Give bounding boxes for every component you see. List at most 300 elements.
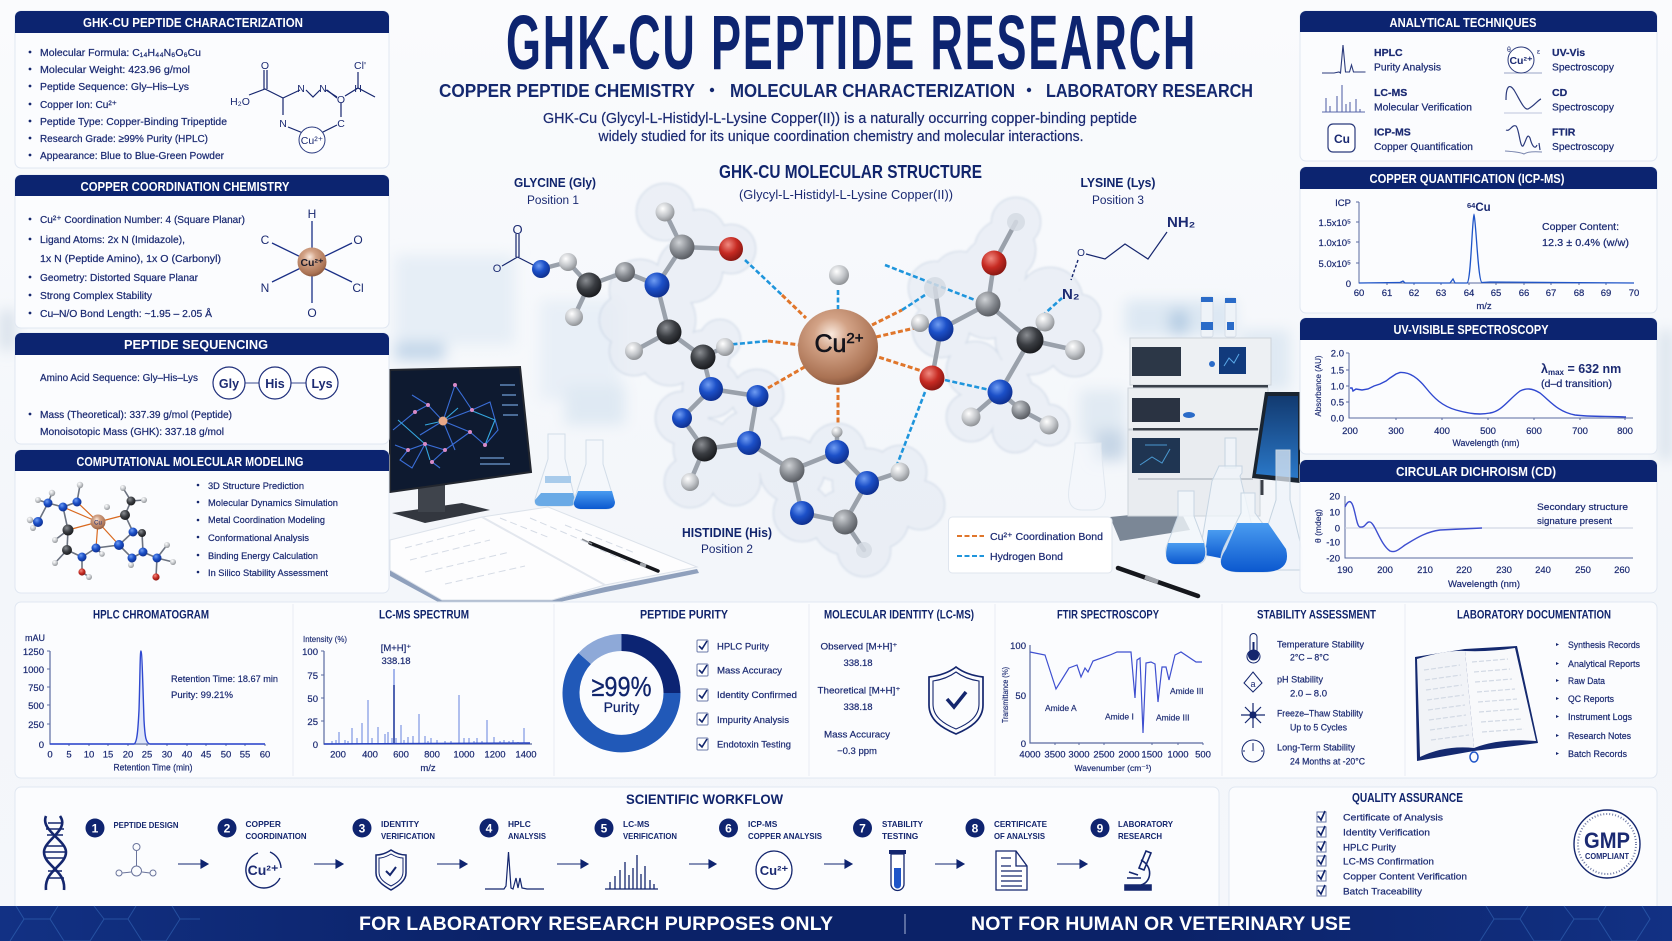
panel: laboratory documentation overlay: Raw Data	[1568, 676, 1606, 687]
chart: ICP-MS spectrum: 67	[1546, 288, 1556, 299]
panel: peptide characterization: Molecular Weight: 423.96 g/mol	[40, 64, 190, 76]
icon: UV-Vis: ε	[1537, 49, 1540, 56]
chart: HPLC chromatogram: 45	[201, 750, 211, 760]
chart: LC-MS spectrum: 338.18	[381, 656, 411, 667]
chart: LC-MS spectrum: 400	[362, 750, 378, 760]
panel: copper coordination chemistry: 1x N (Peptide Amino), 1x O (Carbonyl)	[40, 253, 221, 265]
lysine label: Position 3	[1092, 195, 1144, 207]
panel: analytical techniques	[1300, 11, 1657, 161]
checklist: purity: Endotoxin Testing	[717, 740, 791, 750]
chart: CD spectrum: -10	[1326, 538, 1340, 548]
chart: CD spectrum: signature present	[1537, 516, 1612, 527]
chart: HPLC chromatogram	[23, 610, 278, 774]
workflow step numbers: 9	[1097, 822, 1104, 836]
chart: UV-Vis absorbance	[1313, 348, 1633, 449]
chart: CD spectrum: 250	[1575, 565, 1591, 576]
diagram: square planar coordination	[261, 207, 364, 320]
diagram: amino acid chain: Gly	[219, 377, 239, 391]
icon: document	[996, 851, 1027, 890]
lysine label: LYSINE (Lys)	[1080, 175, 1156, 190]
panel: laboratory documentation overlay: Synthesis Records	[1568, 640, 1640, 651]
block: molecular identity: 338.18	[843, 658, 873, 669]
panel: copper coordination chemistry	[15, 175, 389, 328]
chart: ICP-MS spectrum: 64	[1464, 288, 1474, 299]
chart: ICP-MS spectrum: Copper Content:	[1542, 221, 1619, 233]
panel: ICP-MS copper quantification: COPPER QUANTIFICATION (ICP-MS)	[1370, 171, 1564, 186]
workflow step labels: CERTIFICATE	[994, 819, 1047, 829]
chart: UV-Vis absorbance: 200	[1342, 426, 1358, 437]
panel: analytical techniques: Spectroscopy	[1552, 62, 1615, 74]
subtitle: MOLECULAR CHARACTERIZATION	[730, 80, 1015, 101]
workflow step labels: RESEARCH	[1118, 831, 1162, 841]
workflow step labels: COORDINATION	[246, 831, 306, 841]
chart: LC-MS spectrum: 75	[307, 671, 318, 682]
panel: analytical techniques: HPLC	[1374, 47, 1403, 59]
chart: HPLC chromatogram: Purity: 99.21%	[171, 690, 234, 701]
chart: FTIR spectrum: 1000	[1167, 750, 1189, 760]
QA checklist: Copper Content Verification	[1343, 872, 1467, 882]
diagram: square planar coordination: Cu²⁺	[300, 257, 324, 269]
panel: analytical techniques: CD	[1552, 87, 1568, 99]
chart: LC-MS spectrum: Intensity (%)	[303, 634, 347, 644]
illustration: open lab book	[1415, 646, 1538, 762]
panel: laboratory documentation overlay: Research Notes	[1568, 731, 1631, 742]
chart: LC-MS spectrum: 25	[307, 717, 318, 728]
chart: LC-MS spectrum: 1400	[515, 750, 537, 760]
chart: ICP-MS spectrum: 70	[1629, 288, 1639, 299]
panel: analytical techniques: Purity Analysis	[1374, 62, 1441, 74]
chart: FTIR spectrum: 3500	[1044, 750, 1066, 760]
block: molecular identity: Theoretical [M+H]⁺	[818, 686, 900, 696]
block: molecular identity: MOLECULAR IDENTITY (LC-MS)	[824, 610, 974, 622]
panel: quality assurance	[1229, 787, 1657, 912]
checklist: purity: HPLC Purity	[717, 642, 769, 652]
chart: HPLC chromatogram: 500	[28, 701, 44, 712]
intro text: widely studied for its unique coordination chemistry and molecular interactions.	[598, 129, 1084, 145]
badge: GMP compliant: GMP	[1584, 828, 1630, 853]
chart: UV-Vis absorbance: 600	[1526, 426, 1542, 437]
panel: laboratory documentation overlay: Instrument Logs	[1568, 712, 1632, 723]
panel: laboratory documentation overlay	[1415, 610, 1640, 762]
lab instrument stack	[1110, 297, 1300, 541]
QA checklist: LC-MS Confirmation	[1343, 856, 1434, 868]
legend: bond types: Hydrogen Bond	[990, 551, 1063, 563]
copper ion sphere: Cu	[814, 330, 846, 358]
chart: HPLC chromatogram: HPLC CHROMATOGRAM	[93, 610, 209, 622]
lysine label	[1080, 175, 1156, 207]
chart: FTIR spectrum: Transmittance (%)	[1000, 667, 1010, 723]
checklist: purity	[697, 640, 797, 750]
chart: UV-Vis absorbance: 0.5	[1331, 398, 1344, 408]
panel: laboratory documentation overlay: Analytical Reports	[1568, 659, 1640, 670]
block: stability assessment	[1241, 610, 1376, 768]
lysine side chain skeletal: NH₂	[1167, 214, 1195, 231]
legend: bond types: Cu²⁺ Coordination Bond	[990, 531, 1103, 543]
icon: microscope	[1125, 851, 1151, 890]
chart: UV-Vis absorbance: 500	[1480, 426, 1496, 437]
panel: circular dichroism	[1300, 460, 1657, 593]
glycine skeletal fragment labels	[493, 222, 523, 275]
icon: Cu ion circle: Cu²⁺	[760, 863, 788, 878]
chart: HPLC chromatogram: 5	[66, 750, 72, 760]
chart: HPLC chromatogram: mAU	[25, 633, 45, 643]
panel: analytical techniques: LC-MS	[1374, 87, 1407, 99]
diagram: GHK-Cu skeletal formula	[230, 60, 375, 153]
subtitle: COPPER PEPTIDE CHEMISTRY	[439, 80, 696, 101]
chart: HPLC chromatogram: 0	[47, 750, 53, 760]
legend: bond types	[948, 517, 1112, 573]
panel: analytical techniques: Molecular Verification	[1374, 102, 1472, 114]
panel: analytical techniques: FTIR	[1552, 126, 1576, 138]
icon: UV-Vis: θ	[1507, 47, 1511, 54]
chart: LC-MS spectrum: 0	[313, 740, 318, 751]
icon: clock	[1242, 740, 1264, 762]
panel: computational modeling	[15, 450, 389, 593]
chart: ICP-MS spectrum: 65	[1491, 288, 1501, 299]
diagram: square planar coordination: O	[353, 233, 363, 247]
chart: FTIR spectrum: FTIR SPECTROSCOPY	[1057, 610, 1159, 622]
chart: FTIR spectrum: Amide I	[1105, 712, 1134, 722]
panel: copper coordination chemistry: Cu–N/O Bond Length: ~1.95 – 2.05 Å	[40, 307, 212, 320]
chart: ICP-MS spectrum: 1.5x10⁵	[1319, 218, 1351, 229]
blurred laboratory background	[0, 255, 1672, 460]
block: stability assessment: 2°C – 8°C	[1290, 652, 1329, 664]
chart: HPLC chromatogram: 15	[103, 750, 113, 760]
diagram: small ball-and-stick model: Cu	[94, 520, 102, 526]
panel: peptide sequencing: Amino Acid Sequence: Gly–His–Lys	[40, 372, 198, 384]
panel: copper coordination chemistry: Geometry: Distorted Square Planar	[40, 272, 198, 284]
diagram: GHK-Cu skeletal formula: N	[279, 118, 287, 130]
chart: CD spectrum: 240	[1535, 565, 1551, 576]
footer banner	[0, 906, 1672, 941]
lysine side chain skeletal: N₂	[1062, 286, 1080, 303]
workflow step numbers: 2	[224, 822, 231, 836]
block: stability assessment: Temperature Stability	[1277, 640, 1364, 650]
panel: peptide characterization	[15, 11, 389, 168]
diagram: square planar coordination: O	[307, 306, 317, 320]
panel: analytical techniques: Spectroscopy	[1552, 102, 1615, 114]
chart: UV-Vis absorbance: (d–d transition)	[1541, 378, 1612, 390]
chart: UV-Vis absorbance: 300	[1388, 426, 1404, 437]
icon: HPLC trace	[485, 852, 544, 889]
icon: test tube	[889, 850, 906, 890]
intro text	[543, 111, 1137, 145]
chart: UV-Vis absorbance: Wavelength (nm)	[1452, 438, 1520, 449]
diagram: GHK-Cu skeletal formula: N	[319, 83, 327, 95]
open notebook with pen	[390, 507, 699, 603]
chart: FTIR spectrum: 2500	[1093, 750, 1115, 760]
chart: HPLC chromatogram: 60	[260, 750, 270, 760]
chart: LC-MS spectrum: 100	[302, 647, 318, 658]
icon: pH drop: a	[1250, 679, 1256, 689]
histidine label: Position 2	[701, 544, 753, 556]
block: molecular identity: 338.18	[843, 702, 873, 713]
diagram: amino acid chain	[213, 367, 338, 399]
lysine side chain skeletal: O	[1077, 248, 1085, 259]
footer banner: FOR LABORATORY RESEARCH PURPOSES ONLY	[359, 913, 833, 935]
chart: UV-Vis absorbance: 2.0	[1331, 348, 1344, 360]
chart: LC-MS spectrum: 600	[393, 750, 409, 760]
chart: UV-Vis absorbance: 700	[1572, 426, 1588, 437]
panel: computational modeling: In Silico Stability Assessment	[208, 568, 328, 579]
workflow step labels: STABILITY	[882, 819, 923, 829]
chart: UV-Vis absorbance: 400	[1434, 426, 1450, 437]
chart: UV-Vis absorbance: λ	[1541, 362, 1548, 376]
panel: analytical techniques: ANALYTICAL TECHNIQUES	[1390, 15, 1537, 30]
chart: HPLC chromatogram: 50	[221, 750, 231, 760]
icon: LC-MS bars	[605, 855, 658, 889]
histidine label	[682, 525, 772, 556]
glycine skeletal fragment labels: O	[512, 222, 523, 237]
chart: CD spectrum: 10	[1329, 508, 1340, 518]
chart: FTIR spectrum: 0	[1021, 739, 1026, 750]
icon: FTIR	[1505, 126, 1542, 154]
chart: peptide purity donut: Purity	[604, 699, 639, 715]
diagram: GHK-Cu skeletal formula: Cl'	[354, 60, 366, 72]
chart: HPLC chromatogram: 1250	[23, 647, 44, 658]
chart: ICP-MS spectrum: Cu	[1475, 202, 1491, 214]
diagram: GHK-Cu skeletal formula: O	[337, 94, 345, 106]
heading: molecular structure: GHK-CU MOLECULAR STRUCTURE	[719, 162, 982, 182]
panel: computational modeling: Molecular Dynamics Simulation	[208, 498, 338, 509]
icon: copper ion cycle	[246, 852, 281, 888]
workflow step numbers: 3	[359, 822, 366, 836]
workflow step labels: COPPER ANALYSIS	[748, 831, 822, 841]
chart: CD spectrum: Wavelength (nm)	[1448, 579, 1520, 590]
chart: FTIR spectrum	[1000, 610, 1211, 773]
chart: ICP-MS spectrum: 68	[1574, 288, 1584, 299]
intro text: GHK-Cu (Glycyl-L-Histidyl-L-Lysine Copper(II)) is a naturally occurring copper-binding peptide	[543, 111, 1137, 127]
chart: ICP-MS spectrum	[1319, 198, 1639, 312]
diagram: GHK-Cu skeletal formula: H	[354, 83, 362, 95]
diagram: GHK-Cu skeletal formula: H₂O	[230, 96, 250, 108]
workflow step numbers: 5	[601, 822, 608, 836]
panel: peptide characterization: Molecular Formula: C₁₄H₄₄N₆O₆Cu	[40, 47, 201, 59]
block: molecular identity: Observed [M+H]⁺	[820, 642, 898, 652]
panel: laboratory documentation overlay: Batch Records	[1568, 749, 1627, 760]
chart: UV-Vis absorbance: 1.0	[1331, 382, 1344, 392]
workflow step numbers	[86, 818, 1110, 838]
checklist: purity: Mass Accuracy	[717, 666, 782, 676]
icon: CD	[1504, 87, 1542, 113]
glycine label: Position 1	[527, 195, 579, 207]
chart: HPLC chromatogram: 750	[28, 683, 44, 694]
coordination and hydrogen bonds	[725, 260, 1078, 470]
icon: pH drop	[1244, 672, 1262, 692]
chart: FTIR spectrum: 500	[1195, 750, 1211, 760]
glycine label: GLYCINE (Gly)	[514, 175, 596, 190]
panel: copper coordination chemistry: Strong Complex Stability	[40, 290, 153, 302]
copper ion sphere	[798, 309, 878, 385]
chart: CD spectrum: 20	[1329, 492, 1340, 502]
molecule: central GHK-Cu 3D structure	[493, 184, 1101, 576]
chart: HPLC chromatogram: 0	[39, 740, 44, 751]
diagram: square planar coordination: N	[261, 281, 269, 295]
panel: peptide sequencing: Monoisotopic Mass (GHK): 337.18 g/mol	[40, 426, 224, 438]
chart: HPLC chromatogram: 10	[84, 750, 94, 760]
chart: LC-MS spectrum: m/z	[420, 763, 436, 774]
workflow step numbers: 4	[486, 822, 493, 836]
block: molecular identity: −0.3 ppm	[837, 746, 877, 757]
panel: peptide characterization: Peptide Type: Copper-Binding Tripeptide	[40, 116, 227, 128]
panel: laboratory documentation overlay: QC Reports	[1568, 694, 1614, 705]
icon: identity shield	[376, 850, 406, 890]
chart: peptide purity donut: PEPTIDE PURITY	[640, 610, 728, 622]
icon: peptide design	[116, 844, 156, 876]
chart: ICP-MS spectrum: ICP	[1335, 198, 1351, 209]
chart: ICP-MS spectrum: 66	[1519, 288, 1529, 299]
chart: LC-MS spectrum: 200	[330, 750, 346, 760]
chart: CD spectrum	[1313, 492, 1633, 590]
panel: peptide characterization: Copper Ion: Cu²⁺	[40, 99, 117, 111]
chart: CD spectrum: 190	[1337, 565, 1353, 576]
chart: ICP-MS spectrum: 12.3 ± 0.4% (w/w)	[1542, 237, 1629, 249]
chart: ICP-MS spectrum: 5.0x10⁵	[1319, 259, 1351, 270]
panel: laboratory documentation overlay: LABORATORY DOCUMENTATION	[1457, 610, 1611, 622]
icon: Cu box	[1328, 124, 1355, 152]
panel: peptide characterization: Research Grade: ≥99% Purity (HPLC)	[40, 133, 208, 145]
panel: computational modeling: COMPUTATIONAL MOLECULAR MODELING	[76, 454, 304, 469]
chart: ICP-MS spectrum: 64	[1467, 201, 1476, 210]
panel: computational modeling: Binding Energy Calculation	[208, 551, 318, 562]
block: stability assessment: 24 Months at -20°C	[1290, 756, 1365, 768]
QA checklist: Identity Verification	[1343, 828, 1430, 838]
chart: ICP-MS spectrum: 0	[1346, 279, 1351, 290]
chart: peptide purity donut: ≥99%	[592, 671, 652, 702]
chart: ICP-MS spectrum: 1.0x10⁵	[1319, 238, 1351, 249]
panel: analytical techniques: Copper Quantification	[1374, 141, 1473, 153]
panel: scientific workflow	[15, 787, 1219, 912]
checklist: purity: Impurity Analysis	[717, 715, 789, 726]
panel: copper coordination chemistry: Cu²⁺ Coordination Number: 4 (Square Planar)	[40, 214, 245, 226]
chart: CD spectrum: 210	[1417, 565, 1433, 576]
block: molecular identity	[818, 610, 983, 757]
diagram: square planar coordination: Cl	[352, 281, 364, 295]
workflow step labels: ICP-MS	[748, 819, 778, 829]
panel: peptide sequencing	[15, 333, 389, 444]
badge: GMP compliant: COMPLIANT	[1585, 852, 1629, 861]
block: molecular identity: Mass Accuracy	[824, 730, 890, 740]
chart: CD spectrum: Secondary structure	[1537, 502, 1628, 513]
diagram: amino acid chain: His	[265, 377, 285, 391]
chart: CD spectrum: 260	[1614, 565, 1630, 576]
chart: CD spectrum: θ (mdeg)	[1313, 509, 1323, 543]
chart: HPLC chromatogram: 30	[162, 750, 172, 760]
chart: CD spectrum: 220	[1456, 565, 1472, 576]
chart: FTIR spectrum: Wavenumber (cm⁻¹)	[1075, 763, 1152, 773]
diagram: GHK-Cu skeletal formula: C	[337, 118, 345, 130]
panel: analytical techniques: Spectroscopy	[1552, 141, 1615, 153]
workflow step labels: COPPER	[246, 819, 281, 829]
panel: UV-visible spectroscopy	[1300, 318, 1657, 454]
chart: LC-MS spectrum: [M+H]⁺	[381, 643, 411, 654]
icon: thermometer	[1247, 634, 1260, 663]
workflow step numbers: 6	[725, 822, 732, 836]
workflow step labels: PEPTIDE DESIGN	[114, 820, 178, 830]
lysine side chain skeletal	[1062, 214, 1195, 303]
chart: UV-Vis absorbance: = 632 nm	[1564, 362, 1621, 376]
chart: UV-Vis absorbance: 0.0	[1331, 414, 1344, 424]
chart: FTIR spectrum: 50	[1015, 691, 1026, 702]
chart: HPLC chromatogram: 55	[240, 750, 250, 760]
diagram: GHK-Cu skeletal formula: O	[261, 60, 269, 72]
workflow step labels: VERIFICATION	[381, 831, 435, 841]
panel: quality assurance: QUALITY ASSURANCE	[1352, 791, 1463, 805]
icon: UV-Vis: Cu²⁺	[1509, 55, 1533, 67]
badge: GMP compliant	[1574, 810, 1640, 878]
icon: Cu ion circle	[756, 851, 792, 889]
checklist: purity: Identity Confirmed	[717, 690, 797, 701]
chart: ICP-MS spectrum: 63	[1436, 288, 1446, 299]
glycine label	[514, 175, 596, 207]
chart: UV-Vis absorbance: 1.5	[1331, 366, 1344, 376]
chart: ICP-MS spectrum: 62	[1409, 288, 1419, 299]
panel: peptide characterization: GHK-CU PEPTIDE CHARACTERIZATION	[83, 15, 303, 30]
chart: ICP-MS spectrum: 69	[1601, 288, 1611, 299]
panel: peptide sequencing: PEPTIDE SEQUENCING	[124, 337, 268, 352]
chart: HPLC chromatogram: Retention Time (min)	[114, 762, 192, 774]
panel: analytical techniques: UV-Vis	[1552, 47, 1585, 59]
panel: analytical techniques: ICP-MS	[1374, 126, 1411, 138]
diagram: small ball-and-stick model	[27, 482, 176, 581]
workflow step labels: LABORATORY	[1118, 819, 1173, 829]
chart: CD spectrum: -20	[1326, 554, 1340, 564]
chart: HPLC chromatogram: 250	[28, 720, 44, 731]
chart: ICP-MS spectrum: m/z	[1476, 301, 1492, 312]
subtitle: LABORATORY RESEARCH	[1046, 80, 1253, 101]
copper ion sphere: 2+	[846, 330, 864, 347]
panel: computational modeling: Metal Coordination Modeling	[208, 515, 325, 526]
chart: FTIR spectrum: 2000	[1118, 750, 1140, 760]
workflow step labels: IDENTITY	[381, 819, 420, 829]
workflow step labels: TESTING	[882, 831, 918, 841]
workflow step labels: ANALYSIS	[508, 831, 546, 841]
heading: molecular structure: (Glycyl-L-Histidyl-L-Lysine Copper(II))	[739, 188, 953, 202]
chart: HPLC chromatogram: 40	[182, 750, 192, 760]
panel: copper coordination chemistry: Ligand Atoms: 2x N (Imidazole),	[40, 234, 185, 246]
chart: HPLC chromatogram: Retention Time: 18.67 min	[171, 674, 278, 685]
workflow step numbers: 1	[92, 822, 99, 836]
electron density surface	[600, 184, 1101, 576]
chart: LC-MS spectrum: 800	[424, 750, 440, 760]
glass flasks with blue solution	[1069, 438, 1302, 596]
panel: scientific workflow: SCIENTIFIC WORKFLOW	[626, 791, 784, 807]
workflow step numbers: 8	[972, 822, 979, 836]
diagram: square planar coordination: C	[261, 233, 270, 247]
atoms	[532, 202, 1085, 558]
skeletal bonds	[502, 212, 1075, 550]
QA checklist	[1317, 811, 1467, 898]
chart: FTIR spectrum: Amide A	[1045, 703, 1077, 713]
glycine skeletal fragment labels: O	[493, 263, 502, 275]
chart: FTIR spectrum: 4000	[1019, 750, 1041, 760]
block: stability assessment: STABILITY ASSESSMENT	[1257, 610, 1376, 622]
workflow step labels: LC-MS	[623, 819, 650, 829]
panel: copper coordination chemistry: COPPER COORDINATION CHEMISTRY	[80, 179, 290, 194]
panel: peptide characterization: Appearance: Blue to Blue-Green Powder	[40, 150, 224, 162]
panel: computational modeling: Conformational Analysis	[208, 533, 309, 544]
chart: UV-Vis absorbance: 800	[1617, 426, 1633, 437]
block: stability assessment: Long-Term Stability	[1277, 742, 1355, 754]
heading: molecular structure	[719, 162, 982, 202]
chart: LC-MS spectrum	[302, 610, 537, 774]
chart: CD spectrum: 200	[1377, 565, 1393, 576]
chart: UV-Vis absorbance: max	[1548, 368, 1565, 377]
chart: UV-Vis absorbance: Absorbance (AU)	[1313, 355, 1323, 416]
chart: HPLC chromatogram: 20	[123, 750, 133, 760]
panel: analytics row	[15, 602, 1657, 778]
icon: LC-MS	[1322, 85, 1365, 112]
